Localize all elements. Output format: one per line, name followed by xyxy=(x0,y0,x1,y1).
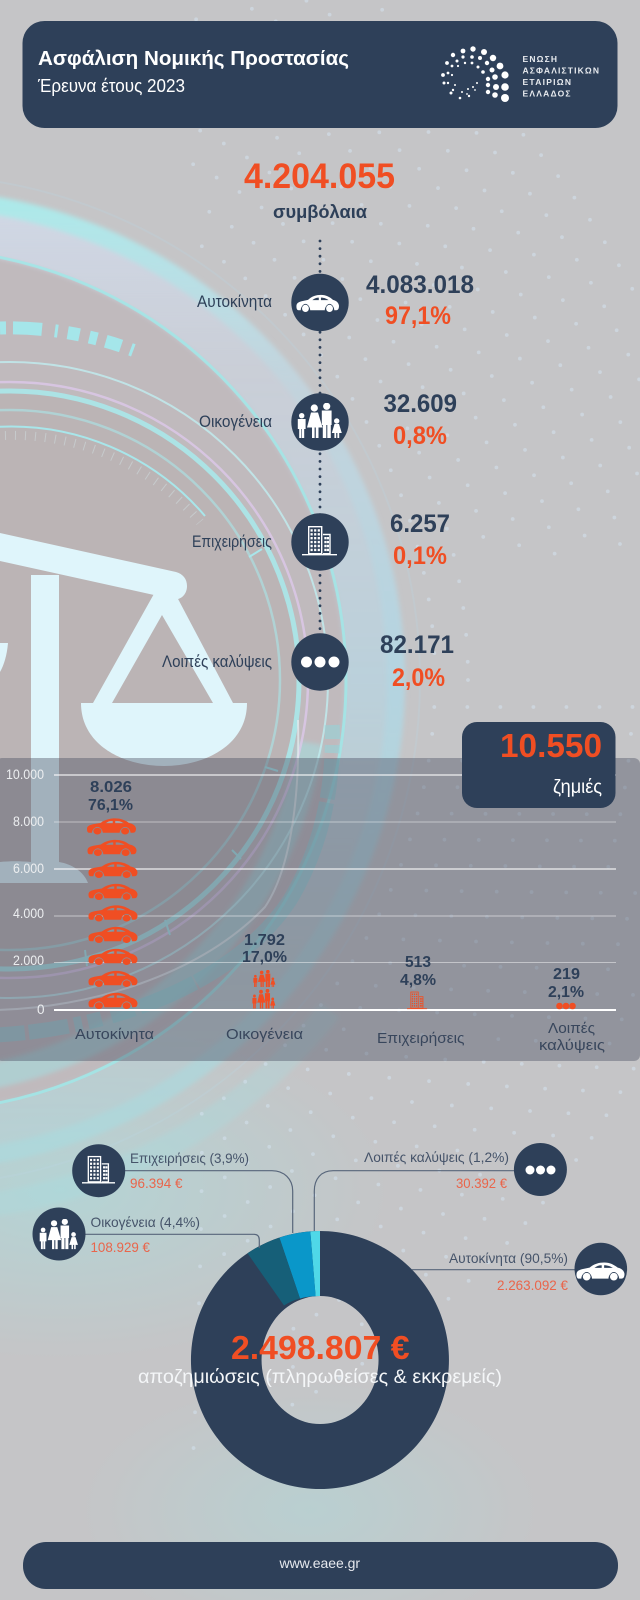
logo text: ΑΣΦΑΛΙΣΤΙΚΩΝ xyxy=(522,66,599,76)
chart axis and gridlines: 10.000 xyxy=(6,767,44,782)
panel: claims bar chart xyxy=(0,758,640,1061)
column: cars: Αυτοκίνητα xyxy=(75,1027,154,1043)
policy row: businesses: Επιχειρήσεις xyxy=(192,532,272,551)
policy row: businesses: 6.257 xyxy=(390,510,450,538)
logo text: ΕΛΛΑΔΟΣ xyxy=(522,88,570,98)
policy row: family: 0,8% xyxy=(393,422,447,450)
policy row: cars xyxy=(197,271,474,331)
policy row: other coverages: 2,0% xyxy=(392,664,445,692)
callout: cars share: Αυτοκίνητα (90,5%) xyxy=(449,1250,568,1266)
callout: other coverages share xyxy=(314,1143,567,1231)
callout: family share: 108.929 € xyxy=(90,1239,150,1255)
policy row: cars: 97,1% xyxy=(385,302,451,330)
column: other coverages: 219 xyxy=(553,966,580,983)
callout: cars share xyxy=(412,1243,627,1295)
callout: family share xyxy=(32,1208,259,1260)
policy row: other coverages xyxy=(162,631,454,692)
callout: businesses share xyxy=(72,1144,293,1233)
donut chart: compensation by coverage xyxy=(191,1231,449,1489)
policy row: cars: Αυτοκίνητα xyxy=(197,292,272,311)
dotted connector line xyxy=(319,241,321,640)
policy row: businesses: 0,1% xyxy=(393,542,447,570)
policy row: other coverages: 82.171 xyxy=(380,631,454,659)
chart axis and gridlines: 4.000 xyxy=(13,906,44,921)
column: family: 17,0% xyxy=(242,949,287,966)
column: family: Οικογένεια xyxy=(226,1027,303,1043)
subtitle: Έρευνα έτους 2023 xyxy=(37,75,185,96)
policy row: family: 32.609 xyxy=(384,390,457,418)
callout: other coverages share: 30.392 € xyxy=(456,1175,507,1191)
policy row: other coverages: Λοιπές καλύψεις xyxy=(162,652,272,671)
column: family xyxy=(226,932,303,1043)
footer bar xyxy=(23,1542,618,1589)
callout: businesses share: 96.394 € xyxy=(130,1175,183,1191)
callout: businesses share: Επιχειρήσεις (3,9%) xyxy=(130,1150,249,1166)
policy row: family: Οικογένεια xyxy=(199,412,272,431)
total policies figure: 4.204.055 xyxy=(244,157,395,196)
icon: scales of justice xyxy=(0,533,247,883)
donut centre total: αποζημιώσεις (πληρωθείσες & εκκρεμείς) xyxy=(138,1366,502,1388)
policy row: businesses xyxy=(192,510,450,571)
callout: cars share: 2.263.092 € xyxy=(497,1277,568,1293)
logo text: ΕΝΩΣΗ xyxy=(522,54,557,64)
column: cars: 8.026 xyxy=(90,779,132,796)
column: other coverages: Λοιπές xyxy=(548,1021,595,1037)
column: businesses: Επιχειρήσεις xyxy=(377,1031,465,1047)
footer bar: www.eaee.gr xyxy=(278,1555,360,1571)
callout: other coverages share: Λοιπές καλύψεις (1,2%) xyxy=(364,1149,509,1165)
total policies figure xyxy=(244,157,395,222)
logo: dot spiral xyxy=(441,46,509,102)
chart axis and gridlines: 6.000 xyxy=(13,861,44,876)
logo text xyxy=(522,54,599,98)
column: cars xyxy=(75,779,154,1043)
title: Ασφάλιση Νομικής Προστασίας xyxy=(38,47,349,70)
chart axis and gridlines: 8.000 xyxy=(13,814,44,829)
column: other coverages: 2,1% xyxy=(548,984,584,1001)
chart axis and gridlines: 2.000 xyxy=(13,953,44,968)
policy row: family xyxy=(199,390,457,451)
callout: family share: Οικογένεια (4,4%) xyxy=(90,1214,200,1230)
column: other coverages xyxy=(539,966,605,1054)
callout box: total claims: 10.550 xyxy=(500,727,602,764)
column: businesses: 513 xyxy=(405,954,431,971)
callout box: total claims xyxy=(462,722,616,808)
total policies figure: συμβόλαια xyxy=(273,202,367,222)
callout box: total claims: ζημιές xyxy=(553,777,602,798)
header banner xyxy=(22,21,618,128)
policy row: cars: 4.083.018 xyxy=(366,271,474,299)
chart axis and gridlines xyxy=(6,767,616,1017)
column: family: 1.792 xyxy=(244,932,285,949)
logo text: ΕΤΑΙΡΙΩΝ xyxy=(522,77,571,87)
column: cars: 76,1% xyxy=(88,797,133,814)
column: businesses xyxy=(377,954,465,1047)
donut centre total: 2.498.807 € xyxy=(231,1329,410,1366)
donut centre total xyxy=(138,1329,502,1388)
column: other coverages: καλύψεις xyxy=(539,1038,605,1054)
chart axis and gridlines: 0 xyxy=(37,1002,45,1017)
column: businesses: 4,8% xyxy=(400,972,436,989)
